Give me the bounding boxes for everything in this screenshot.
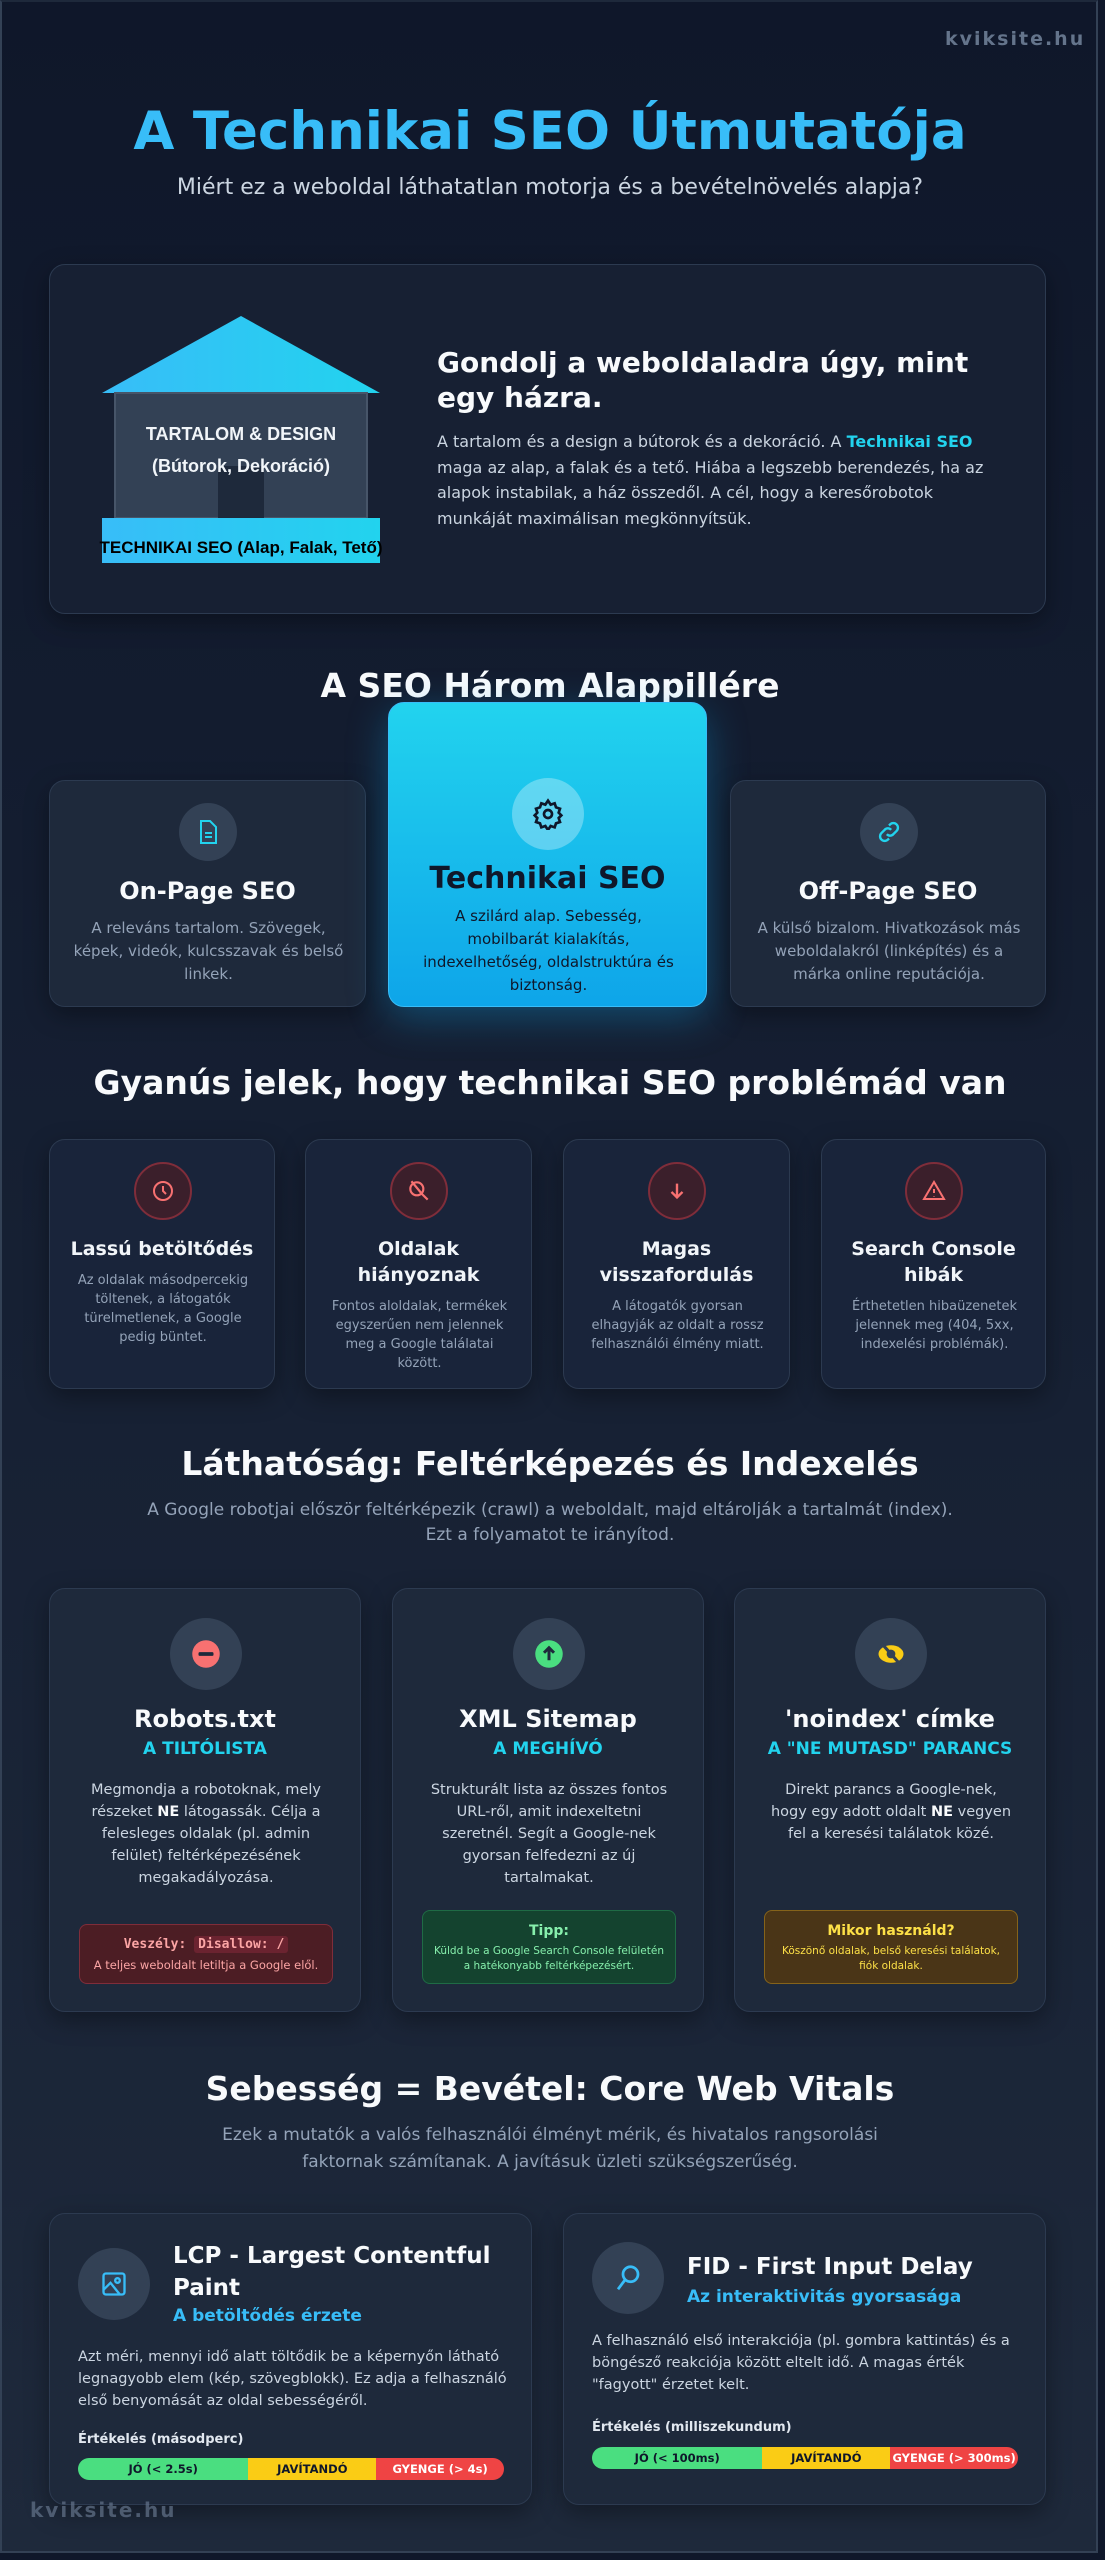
heading: house: Gondolj a weboldaladra úgy, mint egy házra. xyxy=(437,346,968,414)
panel: slow loading: Lassú betöltődés xyxy=(71,1238,253,1260)
panel: technical (highlighted) xyxy=(388,702,707,1007)
heading: warning signs: Gyanús jelek, hogy technikai SEO problémád van xyxy=(94,1063,1006,1102)
bar: FID rating: JÓ (< 100ms) xyxy=(635,2451,720,2465)
callout: tip: Küldd be a Google Search Console felületén a hatékonyabb feltérképezésért. xyxy=(434,1945,664,1972)
panel: FID: FID - First Input Delay xyxy=(687,2254,973,2280)
text: house explanation: A tartalom és a design a bútorok és a dekoráció. A Technikai SEO maga az alap, a falak és a tető. Hiába a legszebb berendezés, ha az alapok instabilak, a ház összedől. A cél, hogy a keresőrobotok munkáját maximálisan megkönnyítsük. xyxy=(437,432,983,528)
icon: house: TARTALOM & DESIGN xyxy=(146,424,336,444)
callout: when to use: Mikor használd? xyxy=(827,1923,955,1939)
heading: three pillars: A SEO Három Alappillére xyxy=(321,666,779,705)
icon: document xyxy=(179,803,237,861)
panel: LCP: Azt méri, mennyi idő alatt töltődik be a képernyőn látható legnagyobb elem (kép, szövegblokk). Ez adja a felhasználó első benyomását az oldal sebességéről. xyxy=(78,2349,507,2409)
icon: house xyxy=(99,316,383,563)
panel: xml sitemap: Strukturált lista az összes fontos URL-ről, amit indexeltetni szeretnél. Segít a Google-nek gyorsan felfedezni az új tartalmakat. xyxy=(431,1782,667,1886)
panel: search console errors: Érthetetlen hibaüzenetek jelennek meg (404, 5xx, indexelési problémák). xyxy=(852,1299,1017,1352)
callout: tip: Tipp: xyxy=(529,1923,569,1939)
panel: slow loading: Az oldalak másodpercekig töltenek, a látogatók türelmetlenek, a Google pedig büntet. xyxy=(78,1273,248,1345)
panel: on-page xyxy=(49,780,366,1007)
icon: clock xyxy=(134,1162,192,1220)
bar: LCP rating xyxy=(78,2458,504,2480)
panel: off-page xyxy=(730,780,1046,1007)
bar: FID rating: GYENGE (> 300ms) xyxy=(892,2451,1016,2465)
watermark top: kviksite.hu xyxy=(945,28,1085,50)
bar: LCP rating: JAVÍTANDÓ xyxy=(277,2462,347,2476)
icon: eye off xyxy=(855,1618,927,1690)
icon: search off xyxy=(390,1162,448,1220)
panel: off-page: Off-Page SEO xyxy=(799,877,977,905)
callout: danger: A teljes weboldalt letiltja a Google elől. xyxy=(94,1958,318,1972)
watermark bottom: kviksite.hu xyxy=(30,2498,176,2522)
panel: FID: A felhasználó első interakciója (pl. gombra kattintás) és a böngésző reakciója között eltelt idő. A magas érték "fagyott" érzetet kelt. xyxy=(592,2333,1010,2393)
panel: high bounce: Magas xyxy=(642,1238,711,1260)
panel: robots.txt: A TILTÓLISTA xyxy=(143,1739,267,1759)
panel: robots.txt: Megmondja a robotoknak, mely részeket NE látogassák. Célja a felesleges oldalak (pl. admin felület) feltérképezésének megakadályozása. xyxy=(91,1782,321,1886)
panel: noindex: 'noindex' címke xyxy=(785,1705,995,1733)
panel: technical (highlighted): A szilárd alap. Sebesség, mobilbarát kialakítás, indexelhetőség, oldalstruktúra és biztonság. xyxy=(423,907,674,994)
panel: slow loading xyxy=(49,1139,275,1389)
callout: tip xyxy=(422,1910,676,1984)
heading: visibility: Láthatóság: Feltérképezés és Indexelés xyxy=(181,1444,919,1483)
text: cwv intro: Ezek a mutatók a valós felhasználói élményt mérik, és hivatalos rangsorolási faktornak számítanak. A javításuk üzleti szükségszerűség. xyxy=(222,2125,878,2172)
heading: core web vitals: Sebesség = Bevétel: Core Web Vitals xyxy=(206,2069,894,2108)
panel: FID: Értékelés (milliszekundum) xyxy=(592,2420,792,2435)
icon: gear xyxy=(512,778,584,850)
icon: link xyxy=(860,803,918,861)
bar: LCP rating: JÓ (< 2.5s) xyxy=(128,2462,198,2476)
panel: xml sitemap xyxy=(392,1588,704,2012)
bar: LCP rating: GYENGE (> 4s) xyxy=(392,2462,488,2476)
panel: on-page: A releváns tartalom. Szövegek, képek, videók, kulcsszavak és belső linkek. xyxy=(74,919,343,983)
bar: FID rating xyxy=(592,2447,1018,2469)
panel: robots.txt xyxy=(49,1588,361,2012)
panel: robots.txt: Robots.txt xyxy=(134,1705,276,1733)
title: On-Page SEO xyxy=(119,877,296,905)
panel: missing pages xyxy=(305,1139,532,1389)
panel: high bounce xyxy=(563,1139,790,1389)
icon: warning xyxy=(905,1162,963,1220)
panel: noindex: A "NE MUTASD" PARANCS xyxy=(768,1739,1012,1759)
callout: when to use: Köszönő oldalak, belső keresési találatok, fiók oldalak. xyxy=(782,1945,1000,1972)
panel: xml sitemap: XML Sitemap xyxy=(459,1705,637,1733)
panel: off-page: A külső bizalom. Hivatkozások más weboldalakról (linképítés) és a márka online reputációja. xyxy=(758,919,1020,983)
title: A Technikai SEO Útmutatója xyxy=(133,101,967,162)
panel: xml sitemap: A MEGHÍVÓ xyxy=(493,1739,603,1759)
panel: search console errors: hibák xyxy=(904,1264,963,1286)
panel: search console errors: Search Console xyxy=(851,1238,1016,1260)
panel: missing pages: Oldalak xyxy=(378,1238,459,1260)
panel: missing pages: hiányoznak xyxy=(358,1264,479,1286)
panel: missing pages: Fontos aloldalak, termékek egyszerűen nem jelennek meg a Google találatai között. xyxy=(332,1299,507,1371)
panel: LCP: Értékelés (másodperc) xyxy=(78,2432,243,2447)
panel: high bounce: visszafordulás xyxy=(600,1264,753,1286)
panel: LCP xyxy=(49,2213,532,2505)
callout: danger xyxy=(79,1924,333,1984)
panel: FID: Az interaktivitás gyorsasága xyxy=(687,2287,961,2307)
panel: noindex xyxy=(734,1588,1046,2012)
panel: LCP: LCP - Largest Contentful Paint xyxy=(173,2243,491,2301)
icon: house: (Bútorok, Dekoráció) xyxy=(152,456,330,476)
panel: LCP: A betöltődés érzete xyxy=(173,2306,362,2326)
icon: image xyxy=(78,2248,150,2320)
icon: house: TECHNIKAI SEO (Alap, Falak, Tető) xyxy=(99,538,383,557)
icon: upload xyxy=(513,1618,585,1690)
bar: FID rating: JAVÍTANDÓ xyxy=(791,2451,861,2465)
callout: when to use xyxy=(764,1910,1018,1984)
panel: noindex: Direkt parancs a Google-nek, hogy egy adott oldalt NE vegyen fel a keresési találatok közé. xyxy=(771,1782,1011,1842)
subtitle: Miért ez a weboldal láthatatlan motorja és a bevételnövelés alapja? xyxy=(177,175,923,200)
icon: block xyxy=(170,1618,242,1690)
callout: danger: Veszély: Disallow: / xyxy=(124,1937,284,1952)
icon: arrow down xyxy=(648,1162,706,1220)
panel: FID xyxy=(563,2213,1046,2505)
icon: pointer xyxy=(592,2242,664,2314)
text: visibility intro: A Google robotjai először feltérképezik (crawl) a weboldalt, majd eltárolják a tartalmát (index). Ezt a folyamatot te irányítod. xyxy=(147,1500,953,1545)
panel: high bounce: A látogatók gyorsan elhagyják az oldalt a rossz felhasználói élmény miatt. xyxy=(591,1299,764,1352)
panel: house analogy xyxy=(49,264,1046,614)
panel: search console errors xyxy=(821,1139,1046,1389)
title: Technikai SEO xyxy=(429,861,666,896)
